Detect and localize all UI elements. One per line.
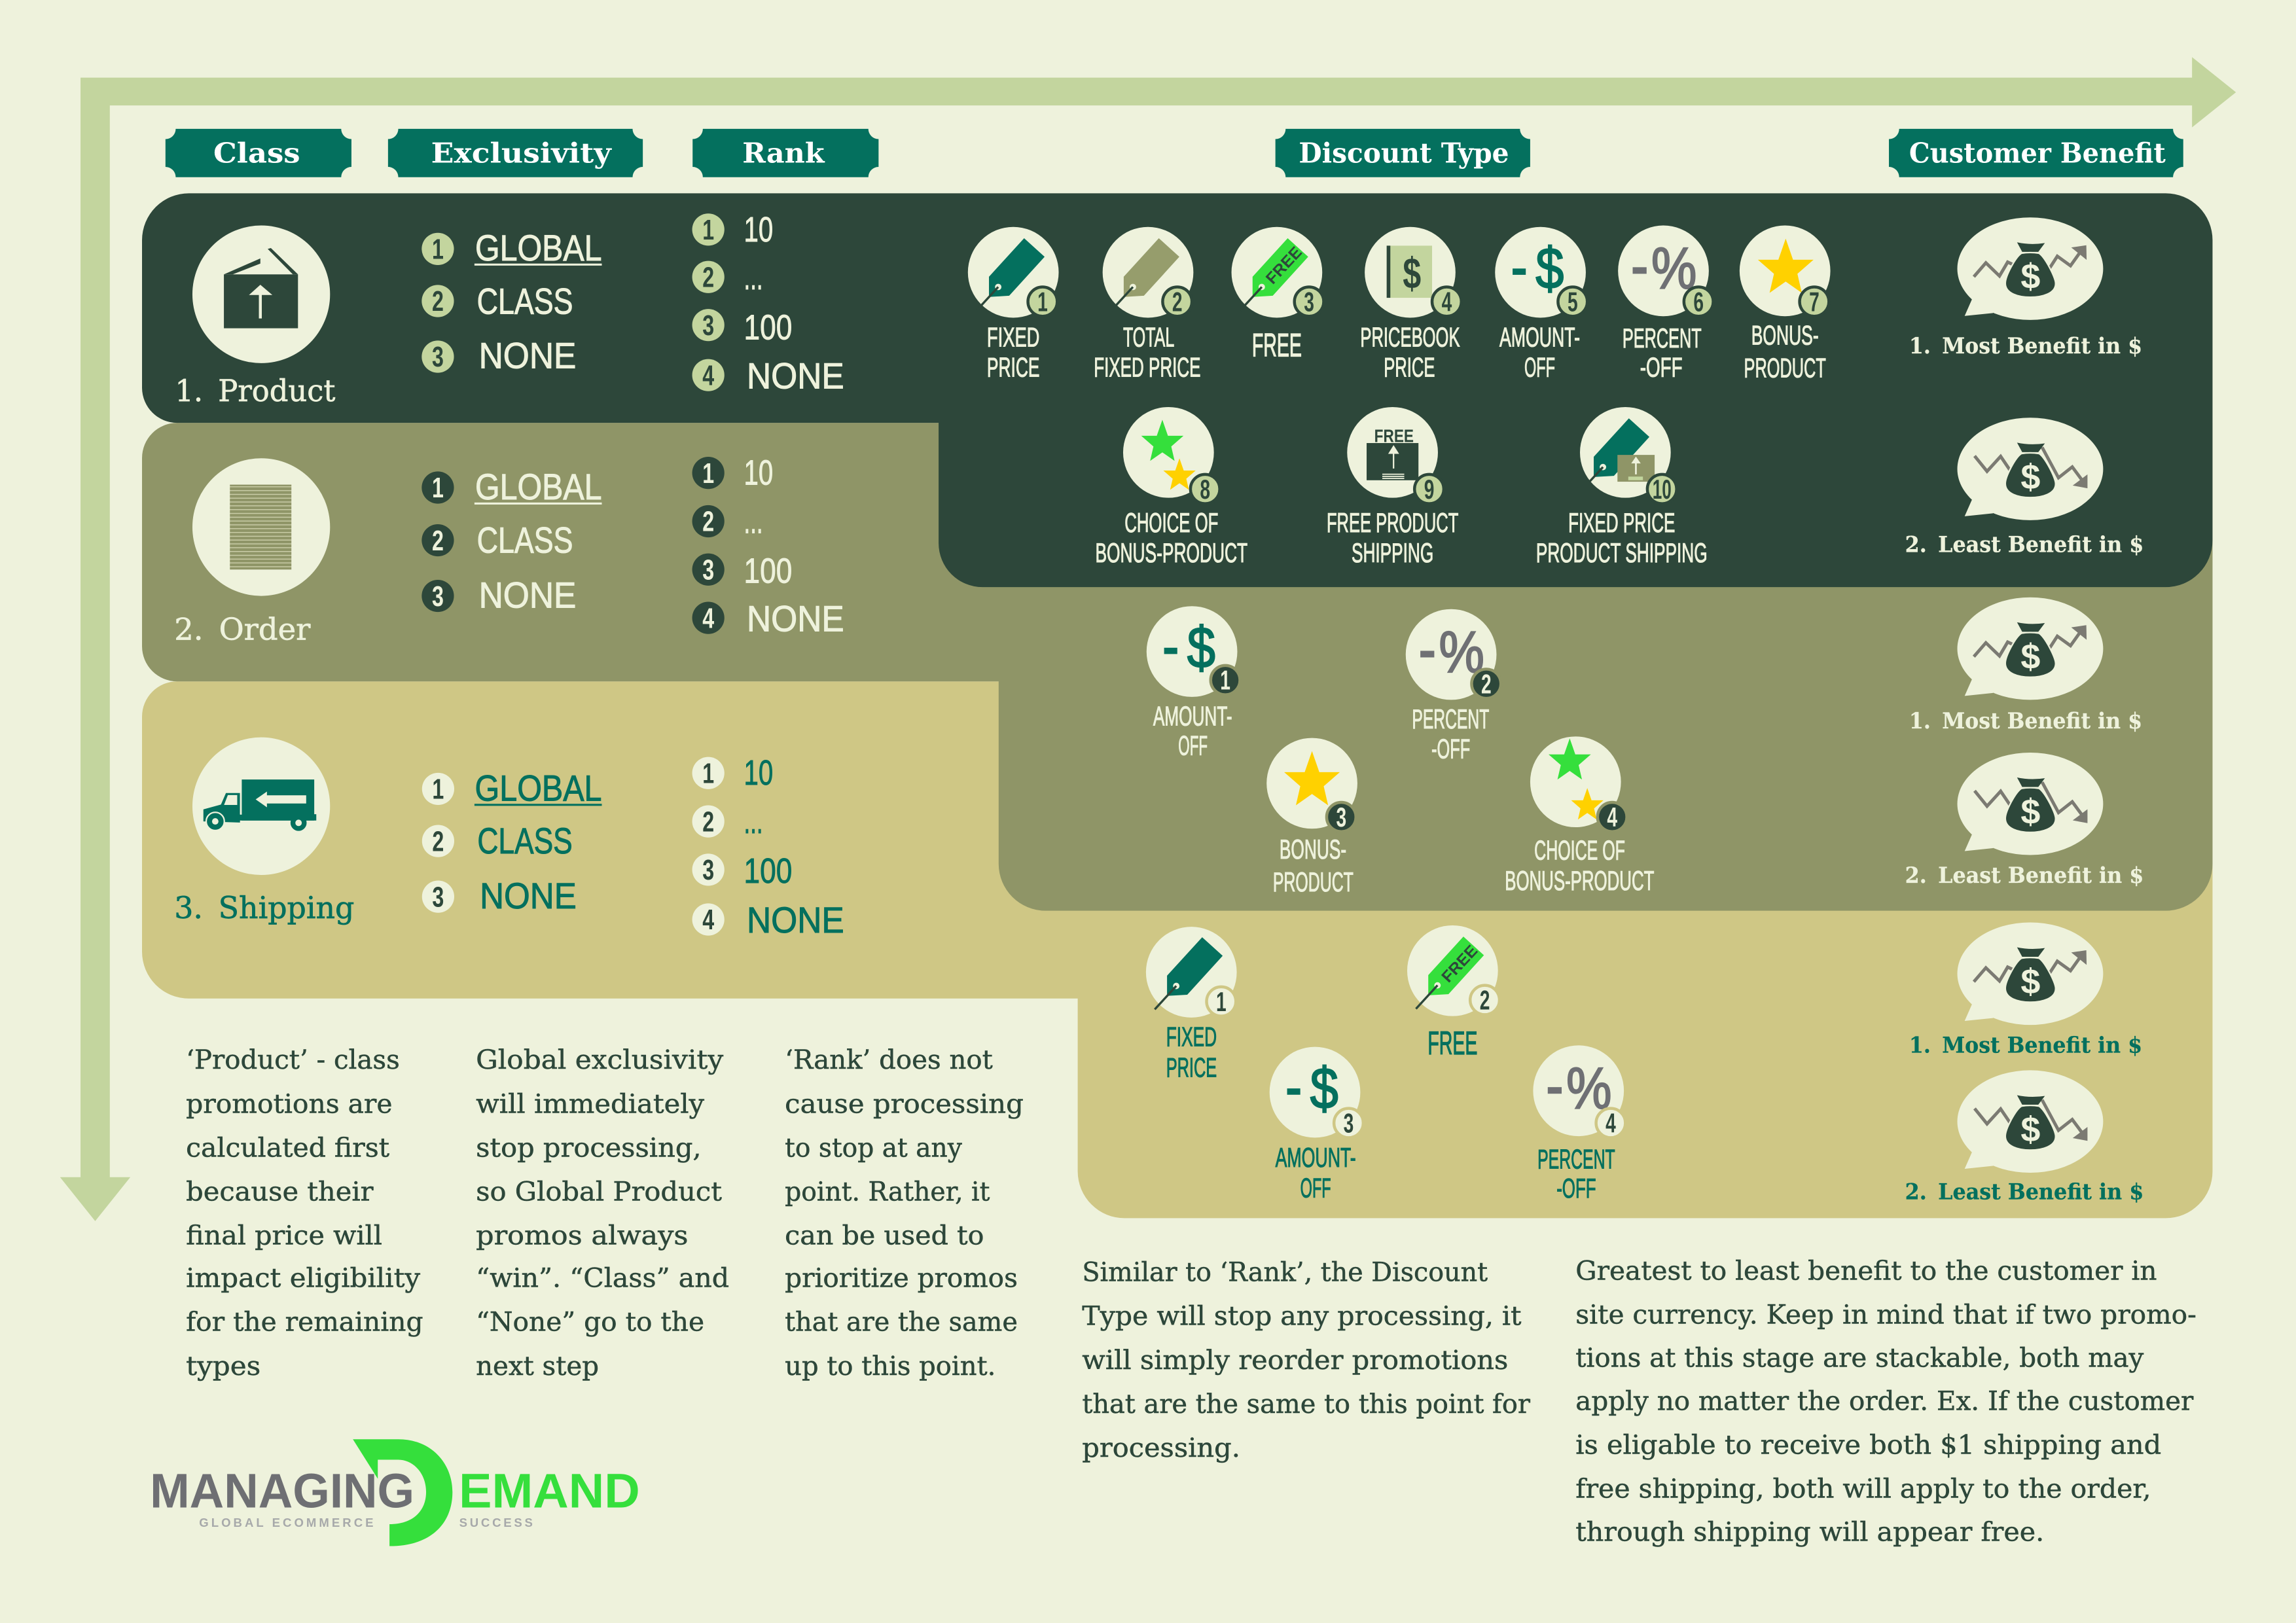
shipping discount 2: free	[1407, 925, 1499, 1061]
discount 10: fixed price product shipping: 10	[1653, 474, 1672, 505]
rank list: product	[692, 210, 844, 396]
discount 4: pricebook price: PRICEBOOK	[1360, 323, 1460, 353]
exclusivity list: shipping: NONE	[480, 875, 577, 916]
text block: exclusivity explanation: next step	[476, 1351, 599, 1382]
discount 8: choice of bonus product: CHOICE OF	[1124, 508, 1218, 538]
icon: delivery truck	[192, 738, 330, 875]
discount 9: free product shipping: 9	[1424, 474, 1434, 505]
customer benefit: product least: $	[2020, 457, 2041, 497]
logo: Managing Demand: SUCCESS	[459, 1516, 533, 1529]
rank list: shipping	[692, 753, 844, 940]
customer benefit: shipping most: $	[2020, 962, 2041, 1001]
header: Class: Class	[213, 137, 300, 169]
discount 4: pricebook price: PRICE	[1384, 353, 1435, 383]
order discount 4: choice of bonus product: 4	[1607, 802, 1617, 832]
text block: exclusivity explanation: stop processing,	[476, 1133, 702, 1163]
text block: exclusivity explanation: so Global Product	[476, 1177, 722, 1207]
exclusivity list: product: 1	[432, 234, 444, 266]
customer benefit: order most: 1. Most Benefit in $	[1909, 707, 2142, 734]
text block: customer benefit explanation: through shipping will appear free.	[1575, 1518, 2044, 1548]
discount 10: fixed price product shipping: FIXED PRICE	[1568, 508, 1675, 538]
exclusivity list: shipping	[422, 768, 602, 916]
header: Discount Type	[1276, 129, 1530, 177]
order discount 2: percent off: %	[1439, 619, 1484, 685]
text block: exclusivity explanation: “win”. “Class” and	[476, 1264, 729, 1294]
rank list: shipping: 4	[702, 904, 715, 936]
rank list: order: 2	[702, 507, 714, 538]
text block: customer benefit explanation: Greatest to least benefit to the customer in	[1575, 1256, 2157, 1286]
rank list: shipping: 1	[702, 758, 714, 789]
discount 2: total fixed price: FIXED PRICE	[1094, 353, 1201, 383]
exclusivity list: product: 3	[432, 342, 444, 373]
shipping discount 3: amount off: 3	[1344, 1109, 1354, 1139]
discount 7: bonus product: PRODUCT	[1744, 353, 1826, 383]
order discount 2: percent off: PERCENT	[1412, 704, 1489, 734]
text block: discount type explanation: that are the same to this point for	[1082, 1389, 1531, 1419]
text block: discount type explanation: processing.	[1082, 1433, 1240, 1463]
discount 4: pricebook price	[1360, 227, 1462, 383]
shipping discount 4: percent off: %	[1566, 1056, 1612, 1121]
order discount 4: choice of bonus product: BONUS-PRODUCT	[1505, 866, 1654, 896]
rank list: product: 2	[702, 262, 714, 294]
icon: order document	[192, 458, 330, 596]
shipping discount 3: amount off: AMOUNT-	[1276, 1143, 1356, 1173]
header: Customer Benefit	[1889, 129, 2183, 177]
discount types: order	[1147, 606, 1654, 897]
exclusivity list: shipping: 2	[432, 826, 444, 857]
text block: customer benefit explanation: site currency. Keep in mind that if two promo-	[1575, 1300, 2197, 1330]
text block: customer benefit explanation: is eligable to receive both $1 shipping and	[1575, 1431, 2161, 1461]
shipping discount 3: amount off: OFF	[1300, 1173, 1331, 1204]
header: Class	[166, 129, 351, 177]
order discount 3: bonus product: PRODUCT	[1273, 867, 1354, 897]
discount 6: percent off	[1618, 226, 1713, 383]
class label: Shipping: 3. Shipping	[174, 890, 354, 925]
text block: exclusivity explanation: Global exclusivity	[476, 1045, 723, 1075]
discount 8: choice of bonus product: 8	[1200, 474, 1210, 505]
header: Exclusivity	[388, 129, 643, 177]
order discount 2: percent off	[1406, 609, 1501, 764]
header: Customer Benefit: Customer Benefit	[1909, 137, 2166, 169]
discount 8: choice of bonus product	[1095, 407, 1247, 568]
order discount 1: amount off: 1	[1220, 666, 1230, 696]
rank list: order: 10	[744, 454, 773, 493]
text block: class explanation: impact eligibility	[186, 1264, 420, 1294]
exclusivity list: order: 1	[432, 473, 444, 504]
rank list: order	[692, 454, 844, 639]
rank list: order: 4	[702, 603, 715, 634]
text block: rank explanation: up to this point.	[785, 1351, 996, 1382]
header: Rank	[692, 129, 878, 177]
order discount 4: choice of bonus product	[1505, 736, 1654, 896]
rank list: product: NONE	[747, 355, 844, 396]
rank list: product: 100	[744, 308, 792, 347]
discount 2: total fixed price	[1094, 227, 1201, 383]
class: order	[174, 458, 330, 647]
text block: discount type explanation: Similar to ‘Rank’, the Discount	[1082, 1258, 1488, 1288]
text block: exclusivity explanation: “None” go to the	[476, 1308, 704, 1338]
discount 10: fixed price product shipping	[1536, 407, 1708, 568]
shipping discount 2: free: FREE	[1427, 1024, 1477, 1061]
discount 9: free product shipping: FREE PRODUCT	[1327, 508, 1458, 538]
exclusivity list: shipping: GLOBAL	[475, 768, 602, 809]
discount 1: fixed price: 1	[1037, 287, 1048, 317]
rank list: product: 4	[702, 360, 715, 391]
shipping discount 1: fixed price: FIXED	[1166, 1022, 1217, 1052]
discount types: shipping	[1146, 925, 1625, 1204]
exclusivity list: shipping: 1	[432, 774, 444, 806]
exclusivity list: product: GLOBAL	[475, 227, 602, 268]
order discount 3: bonus product	[1266, 738, 1357, 897]
logo: Managing Demand: EMAND	[459, 1463, 640, 1518]
customer benefit: product most: $	[2020, 257, 2041, 296]
text block: class explanation: final price will	[186, 1221, 382, 1251]
discount 7: bonus product	[1740, 226, 1831, 383]
shipping discount 2: free: 2	[1480, 986, 1490, 1016]
text block: class explanation	[186, 1045, 423, 1382]
exclusivity list: order: 2	[432, 526, 444, 557]
text block: customer benefit explanation: tions at this stage are stackable, both may	[1575, 1343, 2144, 1373]
shipping discount 4: percent off: -OFF	[1556, 1173, 1596, 1204]
exclusivity list: shipping: 3	[432, 882, 444, 913]
customer benefit: order least	[1905, 753, 2144, 888]
panel: order background	[142, 423, 2212, 911]
customer benefit: order most	[1909, 597, 2142, 734]
discount 5: amount off: OFF	[1524, 353, 1555, 383]
rank list: order: NONE	[747, 597, 844, 639]
text block: discount type explanation: Type will stop any processing, it	[1082, 1302, 1521, 1332]
exclusivity list: product	[422, 227, 602, 376]
customer benefit: shipping least: $	[2020, 1110, 2041, 1149]
discount 9: free product shipping	[1327, 407, 1458, 568]
customer benefit: order least: $	[2020, 792, 2041, 831]
discount 4: pricebook price: $	[1403, 249, 1421, 298]
shipping discount 4: percent off: 4	[1605, 1109, 1616, 1139]
order discount 1: amount off: OFF	[1178, 731, 1208, 761]
text block: rank explanation: point. Rather, it	[785, 1177, 990, 1207]
customer benefit: shipping most	[1909, 922, 2142, 1058]
discount 3: free: FREE	[1252, 326, 1302, 363]
rank list: shipping: 10	[744, 753, 773, 793]
class label: Product: 1. Product	[175, 373, 336, 408]
discount 5: amount off	[1495, 227, 1587, 383]
rank list: product: 10	[744, 210, 773, 249]
exclusivity list: order: CLASS	[477, 520, 573, 561]
text block: rank explanation: prioritize promos	[785, 1264, 1018, 1294]
discount 4: pricebook price: 4	[1442, 287, 1452, 317]
panel: shipping background	[142, 681, 2212, 1218]
discount 1: fixed price: PRICE	[987, 353, 1039, 383]
text block: class explanation: for the remaining	[186, 1308, 423, 1338]
text block: exclusivity explanation: promos always	[476, 1221, 689, 1251]
order discount 3: bonus product: 3	[1336, 802, 1346, 832]
text block: customer benefit explanation	[1575, 1256, 2197, 1548]
discount 7: bonus product: BONUS-	[1751, 321, 1819, 351]
order discount 1: amount off: $	[1187, 615, 1215, 680]
customer benefit: shipping least: 2. Least Benefit in $	[1905, 1178, 2144, 1204]
arrow: process flow, horizontal and vertical	[60, 57, 2236, 1221]
shipping discount 3: amount off	[1270, 1047, 1363, 1204]
logo: Managing Demand: MANAGING	[150, 1463, 414, 1518]
discount types: product	[968, 226, 1831, 568]
text block: customer benefit explanation: apply no matter the order. Ex. If the customer	[1575, 1386, 2194, 1416]
exclusivity list: order: NONE	[479, 574, 576, 615]
logo: Managing Demand	[150, 1439, 640, 1546]
text block: customer benefit explanation: free shipping, both will apply to the order,	[1575, 1474, 2151, 1505]
order discount 2: percent off: 2	[1481, 669, 1492, 699]
rank list: product: ...	[744, 258, 763, 297]
discount 9: free product shipping: SHIPPING	[1352, 538, 1433, 568]
header: Rank: Rank	[742, 137, 825, 169]
discount 6: percent off: -OFF	[1640, 353, 1683, 383]
discount 3: free	[1232, 227, 1323, 363]
text block: discount type explanation	[1082, 1258, 1531, 1463]
discount 9: free product shipping: FREE	[1374, 426, 1414, 446]
discount 2: total fixed price: 2	[1172, 287, 1183, 317]
discount 10: fixed price product shipping: PRODUCT SHIPPING	[1536, 538, 1708, 568]
exclusivity list: shipping: CLASS	[477, 820, 573, 861]
order discount 1: amount off	[1147, 606, 1240, 761]
discount 3: free: 3	[1304, 287, 1314, 317]
text block: class explanation: calculated first	[186, 1133, 389, 1163]
exclusivity list: order: 3	[432, 581, 444, 613]
text block: rank explanation: can be used to	[785, 1221, 984, 1251]
text block: rank explanation: to stop at any	[785, 1133, 962, 1163]
rank list: shipping: ...	[744, 802, 763, 841]
text block: exclusivity explanation	[476, 1045, 729, 1382]
discount 3: free: FREE	[1263, 243, 1306, 288]
header: Discount Type: Discount Type	[1299, 137, 1509, 169]
rank list: order: 1	[702, 458, 714, 490]
header: Exclusivity: Exclusivity	[431, 137, 612, 169]
shipping discount 1: fixed price	[1146, 927, 1237, 1082]
customer benefit: product least	[1905, 418, 2144, 557]
rank list: shipping: 2	[702, 806, 714, 838]
rank list: shipping: 3	[702, 855, 714, 886]
text block: class explanation: because their	[186, 1177, 374, 1207]
class: product	[175, 226, 336, 408]
class: shipping	[174, 738, 354, 925]
rank list: shipping: NONE	[747, 899, 844, 940]
customer benefit: order most: $	[2020, 637, 2041, 676]
rank list: product: 3	[702, 310, 714, 342]
icon: product box	[192, 226, 330, 363]
customer benefit: shipping least	[1905, 1070, 2144, 1204]
discount 5: amount off: $	[1535, 236, 1564, 301]
text block: class explanation: types	[186, 1351, 260, 1382]
rank list: order: 3	[702, 555, 714, 586]
discount 7: bonus product: 7	[1809, 287, 1820, 317]
customer benefit: product least: 2. Least Benefit in $	[1905, 531, 2144, 557]
text block: rank explanation: cause processing	[785, 1089, 1024, 1119]
logo: Managing Demand: GLOBAL ECOMMERCE	[199, 1516, 373, 1529]
customer benefit: product most: 1. Most Benefit in $	[1909, 332, 2142, 359]
customer benefit: order least: 2. Least Benefit in $	[1905, 862, 2144, 888]
rank list: order: ...	[744, 501, 763, 541]
text block: rank explanation: ‘Rank’ does not	[785, 1045, 993, 1075]
order discount 2: percent off: -OFF	[1431, 734, 1470, 764]
order discount 1: amount off: AMOUNT-	[1153, 701, 1232, 731]
text block: rank explanation	[785, 1045, 1024, 1382]
discount 6: percent off: 6	[1693, 287, 1704, 317]
discount 2: total fixed price: TOTAL	[1123, 323, 1174, 353]
exclusivity list: product: CLASS	[477, 280, 573, 321]
order discount 4: choice of bonus product: CHOICE OF	[1534, 835, 1625, 865]
customer benefit: shipping most: 1. Most Benefit in $	[1909, 1032, 2142, 1058]
class label: Order: 2. Order	[174, 612, 310, 647]
exclusivity list: order	[422, 466, 602, 615]
rank list: order: 100	[744, 551, 792, 590]
text block: exclusivity explanation: will immediately	[476, 1089, 704, 1119]
discount 8: choice of bonus product: BONUS-PRODUCT	[1095, 538, 1247, 568]
text block: class explanation: ‘Product’ - class	[186, 1045, 400, 1075]
shipping discount 3: amount off: $	[1310, 1056, 1338, 1121]
panel: product background	[142, 193, 2212, 587]
rank list: shipping: 100	[744, 851, 792, 891]
discount 6: percent off: PERCENT	[1623, 323, 1702, 353]
shipping discount 1: fixed price: PRICE	[1166, 1052, 1217, 1082]
shipping discount 4: percent off	[1533, 1045, 1625, 1204]
exclusivity list: product: NONE	[479, 335, 576, 376]
discount 1: fixed price: FIXED	[987, 323, 1039, 353]
rank list: product: 1	[702, 215, 714, 246]
shipping discount 1: fixed price: 1	[1216, 987, 1227, 1017]
shipping discount 2: free: FREE	[1439, 942, 1481, 986]
text block: rank explanation: that are the same	[785, 1308, 1018, 1338]
discount 1: fixed price	[968, 227, 1059, 383]
discount 6: percent off: %	[1651, 236, 1696, 301]
exclusivity list: product: 2	[432, 286, 444, 317]
customer benefit: product most	[1909, 217, 2142, 359]
discount 5: amount off: AMOUNT-	[1499, 323, 1580, 353]
exclusivity list: order: GLOBAL	[475, 466, 602, 507]
discount 5: amount off: 5	[1568, 287, 1578, 317]
order discount 3: bonus product: BONUS-	[1280, 834, 1346, 865]
text block: discount type explanation: will simply reorder promotions	[1082, 1346, 1508, 1376]
text block: class explanation: promotions are	[186, 1089, 393, 1119]
shipping discount 4: percent off: PERCENT	[1537, 1144, 1615, 1174]
